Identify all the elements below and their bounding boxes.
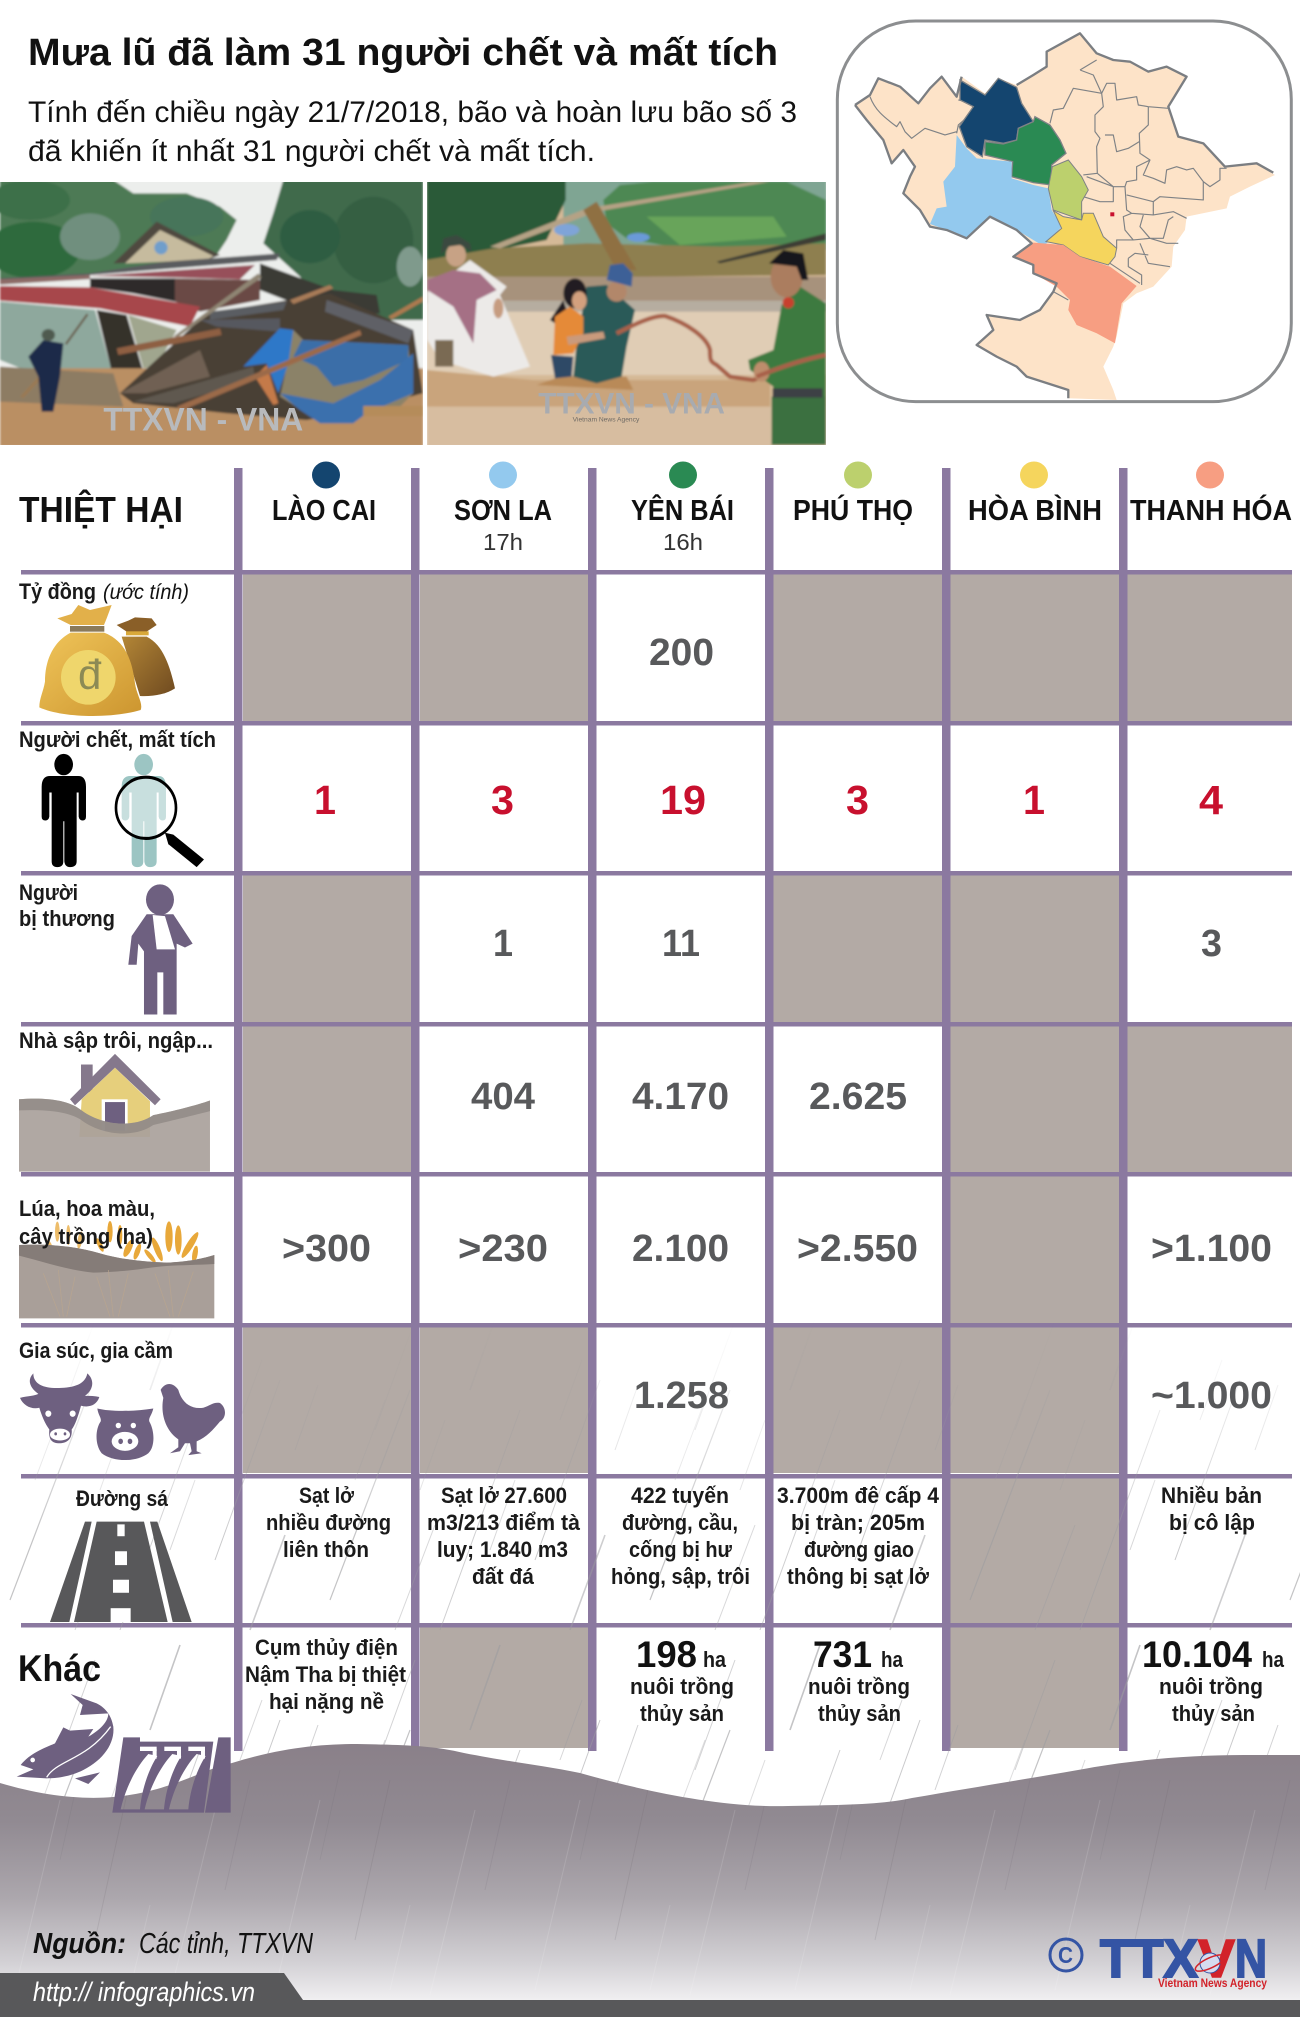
column: Thanh Hóa [1130,462,1292,527]
row label: tỷ đồng [19,579,189,604]
values: khác: ha [703,1647,727,1672]
values: lúa, hoa màu [282,1228,1272,1270]
column: Lào Cai [272,462,376,527]
values: khác: 198 [636,1634,697,1675]
photo: collapsed house [0,180,423,447]
values: người chết, mất tích: 1 [1023,777,1045,823]
values: khác: 10.104 [1142,1634,1252,1675]
values: đường sá: bị tràn; 205m [791,1510,925,1535]
values: người chết, mất tích: 4 [1199,777,1223,823]
icon: fish and dam [17,1694,231,1813]
values: nhà sập trôi [471,1076,907,1118]
values: gia súc, gia cầm: 1.258 [634,1375,729,1417]
row label: lúa, hoa màu: cây trồng (ha) [19,1224,153,1249]
logo: TTXVN: V [1198,1929,1235,1989]
map: Hà Nội marker [1110,212,1114,216]
values: khác: nuôi trồng [630,1674,734,1699]
values: khác: thủy sản [818,1701,901,1726]
values: người chết, mất tích: 3 [846,777,869,823]
photo: flood rescue: TTXVN - VNA [538,387,725,420]
photo: flood rescue: Vietnam News Agency [573,418,639,424]
subtitle: đã khiến ít nhất 31 người chết và mất tích. [28,135,595,168]
footer bar [0,1973,1300,2017]
photo: collapsed house: TTXVN - VNA [103,402,303,438]
grey empty cells [243,574,1292,1748]
column: Yên Bái: YÊN BÁI [631,493,734,527]
logo: TTXVN: N [1235,1929,1267,1989]
values: đường sá: thông bị sạt lở [787,1564,929,1589]
column: Sơn La: 17h [483,529,523,555]
values: nhà sập trôi: 2.625 [809,1076,907,1118]
photo: flood rescue [427,180,827,447]
row label: người bị thương [19,880,115,931]
map panel [837,21,1291,402]
logo: TTXVN: C [1058,1942,1073,1968]
row label: tỷ đồng: (ước tính) [103,581,189,604]
values: người chết, mất tích: 3 [491,777,514,823]
values: nhà sập trôi: 4.170 [632,1076,729,1118]
icon: flooded crops [19,1221,214,1318]
values: đường sá: bị cô lập [1169,1510,1255,1535]
values: đường sá: đất đá [472,1564,535,1589]
row label: tỷ đồng: Tỷ đồng [19,579,96,604]
row label: đường sá: Đường sá [76,1486,169,1511]
values: gia súc, gia cầm: ~1.000 [1151,1375,1272,1417]
values: khác: hại nặng nề [269,1689,384,1714]
map: Lào Cai [959,78,1033,157]
values: lúa, hoa màu: >1.100 [1151,1228,1272,1270]
row label: gia súc, gia cầm: Gia súc, gia cầm [19,1338,173,1363]
icon: cow, pig, chicken [20,1373,225,1460]
values: lúa, hoa màu: >2.550 [797,1228,918,1270]
values: đường sá: đường, cầu, [622,1510,738,1535]
values: đường sá: luy; 1.840 m3 [437,1537,568,1562]
column: Sơn La [454,462,552,555]
column: Yên Bái: 16h [663,529,703,555]
icon: dead and missing people [42,754,204,867]
row label: người bị thương: Người [19,880,78,905]
values: người chết, mất tích [314,777,1223,823]
values: lúa, hoa màu: >300 [282,1228,371,1270]
row label: nhà sập trôi: Nhà sập trôi, ngập... [19,1028,213,1053]
icon: money bags [39,605,175,716]
row label: lúa, hoa màu: Lúa, hoa màu, [19,1196,155,1221]
values: người bị thương: 1 [493,923,513,965]
column: Phú Thọ [793,462,913,527]
row label: người bị thương: bị thương [19,906,115,931]
footer bar: http:// infographics.vn [33,1977,255,2007]
values: khác: Cụm thủy điện [255,1635,398,1660]
map: land [855,33,1275,400]
row label: khác: Khác [18,1648,101,1689]
column: Sơn La: SƠN LA [454,495,552,527]
values: đường sá: đường giao [804,1537,914,1562]
values: khác: ha [1262,1647,1285,1672]
values: đường sá: 3.700m đê cấp 4 [777,1483,940,1508]
logo: TTXVN: TTX [1100,1929,1198,1989]
map: Phú Thọ [1048,160,1088,220]
values: khác: nuôi trồng [1159,1674,1263,1699]
column: Hòa Bình [968,462,1102,527]
map: Yên Bái [985,117,1066,185]
values: khác: thủy sản [640,1701,724,1726]
values: đường sá: m3/213 điểm tà [427,1510,581,1535]
values: người chết, mất tích: 1 [314,777,336,823]
rain over water [28,1800,1272,1940]
icon: flooded house [19,1054,210,1172]
map: Hòa Bình [1046,211,1117,265]
values: đường sá: Nhiều bản [1161,1483,1262,1508]
values: lúa, hoa màu: 2.100 [632,1228,729,1270]
map: Sơn La [930,135,1062,245]
source: Các tỉnh, TTXVN [139,1928,313,1960]
map: Thanh Hóa [1015,243,1137,343]
column: Yên Bái [631,462,734,555]
header: thiệt hại: THIỆT HẠI [19,488,183,530]
source [33,1928,313,1960]
water wave [0,1744,1300,2017]
values: khác [245,1634,1285,1726]
values: đường sá: 422 tuyến [631,1483,729,1508]
title: Mưa lũ đã làm 31 người chết và mất tích [28,32,778,74]
values: khác: nuôi trồng [808,1674,910,1699]
values: người bị thương: 11 [662,923,700,965]
values: tỷ đồng: 200 [649,632,714,674]
icon: road [50,1522,192,1622]
source: Nguồn: [33,1928,126,1960]
values: người chết, mất tích: 19 [660,777,706,823]
values: đường sá: hỏng, sập, trôi [611,1564,750,1589]
values: người bị thương: 3 [1201,923,1222,965]
values: nhà sập trôi: 404 [471,1076,535,1118]
row label: lúa, hoa màu [19,1196,155,1249]
column: Hòa Bình: HÒA BÌNH [968,493,1102,527]
row label: người chết, mất tích: Người chết, mất tích [19,727,216,752]
icon: injured person [128,884,193,1014]
values: người bị thương [493,923,1222,965]
values: khác: Nậm Tha bị thiệt [245,1662,407,1687]
values: lúa, hoa màu: >230 [458,1228,548,1270]
icon: đồng symbol: đ [78,651,102,698]
values: đường sá: liên thôn [283,1537,369,1562]
values: đường sá [266,1483,1262,1589]
values: gia súc, gia cầm [634,1375,1272,1417]
values: khác: thủy sản [1172,1701,1255,1726]
values: đường sá: nhiều đường [266,1510,391,1535]
rain over table [10,1352,1300,1806]
values: khác: 731 [813,1634,872,1675]
logo: TTXVN: Vietnam News Agency [1158,1976,1267,1990]
column: Phú Thọ: PHÚ THỌ [793,493,913,527]
subtitle [28,96,797,168]
column: Thanh Hóa: THANH HÓA [1130,493,1292,527]
table grid [21,468,1292,1751]
values: khác: ha [881,1647,904,1672]
map: outer border [855,33,1273,398]
map: province borders [870,60,1227,300]
values: đường sá: Sạt lở 27.600 [441,1483,567,1508]
values: đường sá: cống bị hư [629,1537,732,1562]
logo: TTXVN [1050,1929,1267,1990]
subtitle: Tính đến chiều ngày 21/7/2018, bão và hoàn lưu bão số 3 [28,96,797,129]
column: Lào Cai: LÀO CAI [272,493,376,527]
values: đường sá: Sạt lở [299,1483,354,1508]
